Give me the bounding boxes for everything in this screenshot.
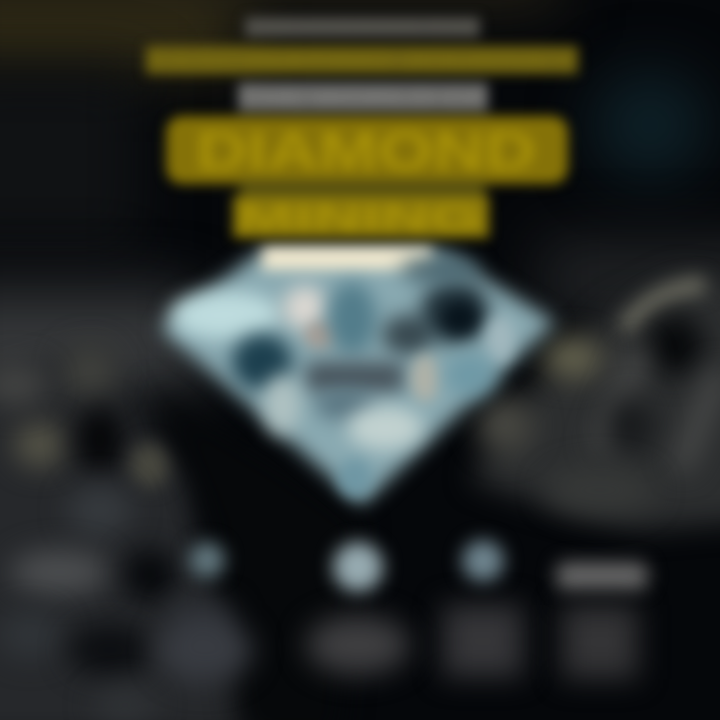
caption 4: Polishing [568,635,632,651]
title line 6 [233,196,489,238]
rocks: right pile [470,275,720,530]
facets [170,291,280,339]
title line 3: THE WORLD OF [240,83,488,113]
caption 1: Exploration [166,642,244,658]
icon 3 [462,540,504,582]
title line 5 [240,180,485,196]
column 2 [306,542,410,675]
rocks: left pile [0,344,270,720]
column 4 [556,562,648,679]
column 3 [443,540,523,677]
title line 4: DIAMOND [196,119,536,182]
title line 2: FASCINATING JOURNEY [148,46,576,76]
caption 2: Extraction [324,637,392,653]
dark shadow under diamond [150,385,360,720]
title line 1: UNCOVERING THE [244,18,480,38]
icon 1 [189,542,225,578]
column 1 [157,542,253,682]
caption 3: Sorting [458,635,508,651]
title line 4 [166,116,568,184]
title [146,17,578,238]
icon 2 [333,542,383,592]
title line 6: MINING [238,197,482,238]
icon 4 [556,562,648,590]
diamond [160,246,556,505]
title line 1 [244,17,480,38]
background glow [0,0,720,400]
